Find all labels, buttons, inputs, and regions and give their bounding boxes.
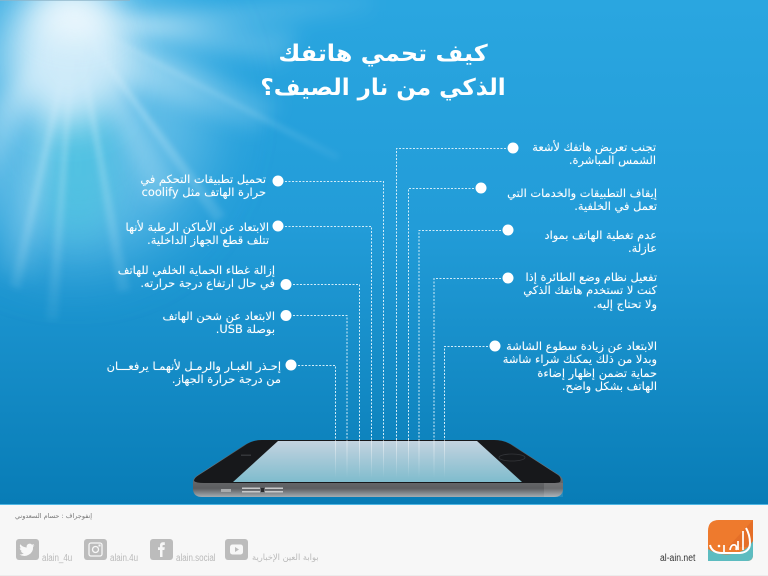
right tip 4: ولا تحتاج إليه. <box>593 297 657 311</box>
footer <box>0 505 768 576</box>
left tip 4: بوصلة USB. <box>216 322 275 336</box>
icon: facebook <box>150 539 173 560</box>
title: الذكي من نار الصيف؟ <box>260 75 506 101</box>
left tip 1: حرارة الهاتف مثل coolify <box>142 185 266 199</box>
handle: twitter: alain_4u <box>42 553 72 564</box>
handle: facebook: alain.social <box>176 553 216 564</box>
right tip 5: الهاتف بشكل واضح. <box>562 379 657 393</box>
right tip 4: كنت لا تستخدم هاتفك الذكي <box>523 283 657 297</box>
right tip 1: الشمس المباشرة. <box>569 153 656 167</box>
left tip 2: تتلف قطع الجهاز الداخلية. <box>147 233 269 247</box>
right tip 5: حماية تضمن إظهار إضاءة <box>537 366 657 380</box>
right tip 4: تفعيل نظام وضع الطائرة إذا <box>525 270 657 284</box>
left tip 1 <box>140 172 266 200</box>
left tip 2: الابتعاد عن الأماكن الرطبة لأنها <box>125 220 269 234</box>
right tip 1: تجنب تعريض هاتفك لأشعة <box>532 140 656 154</box>
left tip 5: إحـذر الغبـار والرمـل لأنهمـا يرفعـــان <box>107 359 281 373</box>
icon: youtube <box>225 539 248 560</box>
credit: إنفوجراف : حسام السعدوني <box>15 512 92 520</box>
icon: twitter <box>16 539 39 560</box>
right tip 5 <box>503 339 657 394</box>
right tip 3: عازلة. <box>628 241 657 255</box>
icon: instagram <box>84 539 107 560</box>
right tip 2: تعمل في الخلفية. <box>574 199 657 213</box>
left tip 2 <box>125 220 269 248</box>
left tip 3: في حال ارتفاع درجة حرارته. <box>140 276 275 290</box>
right tip 4 <box>523 270 658 312</box>
right tip 2 <box>507 186 657 214</box>
left tip 4: الابتعاد عن شحن الهاتف <box>162 309 275 323</box>
left tip 5: من درجة حرارة الجهاز. <box>172 372 281 386</box>
left tip 4 <box>162 309 275 336</box>
left tip 3: إزالة غطاء الحماية الخلفي للهاتف <box>118 263 275 277</box>
right tip 3: عدم تغطية الهاتف بمواد <box>545 228 657 242</box>
right tip 5: وبدلا من ذلك يمكنك شراء شاشة <box>503 352 657 366</box>
site url: al-ain.net <box>660 553 695 564</box>
title <box>260 41 506 101</box>
title: كيف تحمي هاتفك <box>278 41 488 67</box>
logo <box>708 520 753 561</box>
handle: portal: بوابة العين الإخبارية <box>252 552 319 562</box>
right tip 3 <box>544 228 657 256</box>
left tip 5 <box>107 358 281 386</box>
left tip 3 <box>118 263 275 290</box>
right tip 1 <box>532 140 656 168</box>
right tip 5: الابتعاد عن زيادة سطوع الشاشة <box>506 339 657 353</box>
handle: instagram: alain.4u <box>110 553 138 564</box>
right tip 2: إيقاف التطبيقات والخدمات التي <box>507 186 657 200</box>
left tip 1: تحميل تطبيقات التحكم في <box>140 172 266 186</box>
